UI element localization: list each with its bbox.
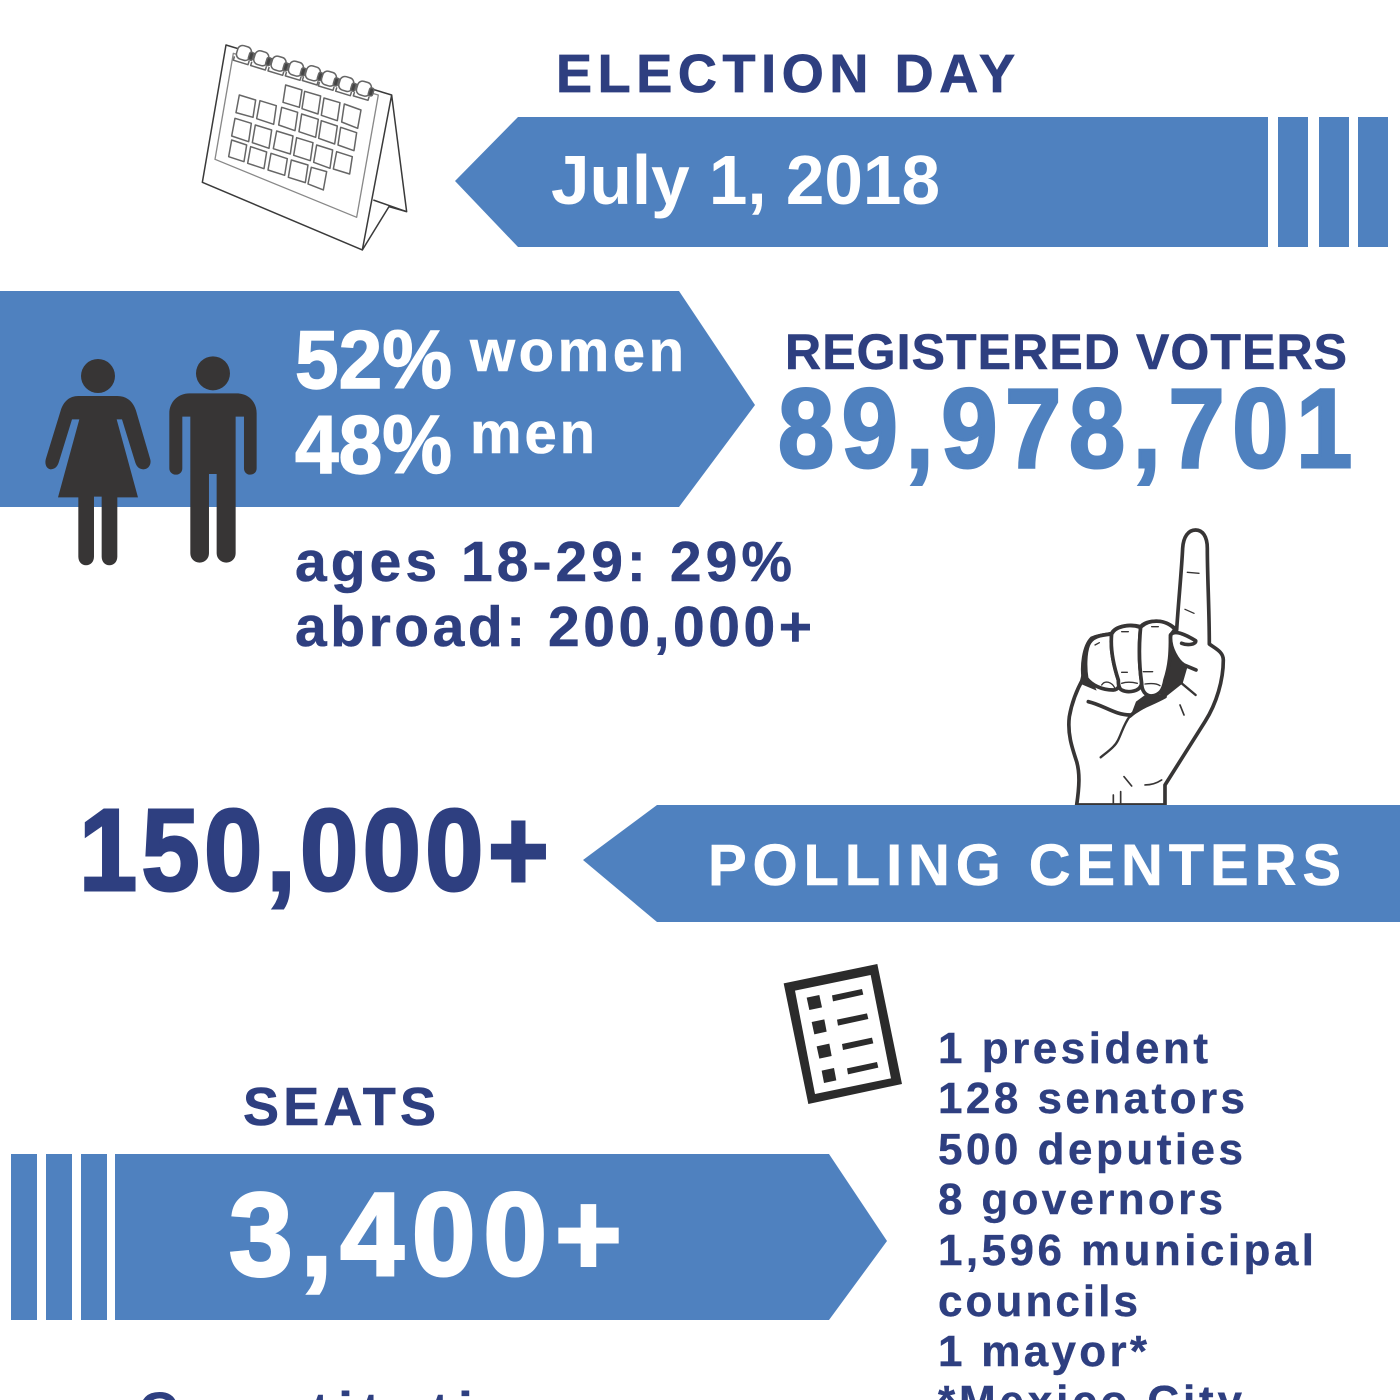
text block: offices on the ballot: 500 deputies [938,1125,1243,1174]
banner: election date [455,117,1388,247]
text block: offices on the ballot: 1,596 municipal [938,1226,1314,1275]
banner: gender split: 48% [295,398,452,491]
icon: woman figure [45,359,151,565]
heading: registered voters: REGISTERED VOTERS [785,324,1347,380]
icon: desk calendar [202,44,407,250]
banner: gender split: 52% [295,313,452,406]
text block: offices on the ballot: 1 president [938,1024,1208,1073]
text block: offices on the ballot: 128 senators [938,1074,1245,1123]
stat: polling center count: 150,000+ [79,786,549,915]
banner: gender split: women [469,319,684,384]
banner: seats count [11,1154,887,1320]
stat: registered voter count: 89,978,701 [778,366,1352,491]
banner: election date: July 1, 2018 [551,141,940,219]
banner: gender split: men [470,401,595,466]
text block: age and abroad stats [295,530,812,659]
heading: seats: SEATS [243,1077,436,1137]
icon: ballot checklist [784,964,902,1104]
banner: gender split [0,291,755,507]
banner: polling centers [583,805,1400,922]
icon: raised index finger hand [1069,530,1223,805]
text block: offices on the ballot: councils [938,1277,1138,1326]
text block: offices on the ballot [938,1024,1314,1400]
banner: seats count: 3,400+ [229,1168,622,1300]
heading: election day: ELECTION DAY [556,44,1015,104]
banner: polling centers: POLLING CENTERS [708,833,1341,898]
icon: man figure [169,356,257,563]
text block: age and abroad stats: abroad: 200,000+ [295,595,812,659]
text block: offices on the ballot: 8 governors [938,1175,1223,1224]
text block: age and abroad stats: ages 18-29: 29% [295,530,792,594]
text block: offices on the ballot: 1 mayor* [938,1327,1148,1376]
